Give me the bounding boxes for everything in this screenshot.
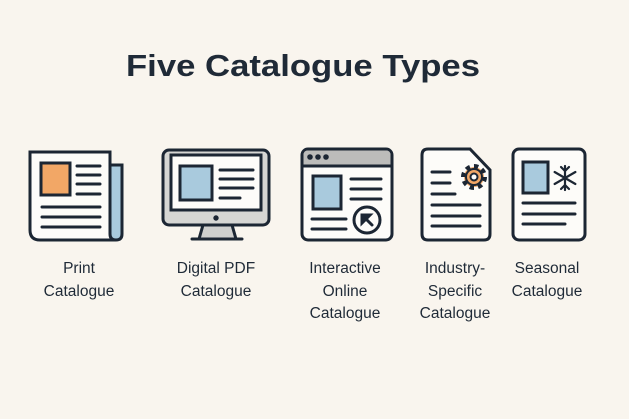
labels: Print xyxy=(63,260,96,277)
labels: Industry- xyxy=(425,260,485,277)
icon: seasonal document xyxy=(513,149,585,240)
labels: Digital PDF xyxy=(177,260,255,277)
labels: Catalogue xyxy=(420,305,490,322)
icon: print catalogue xyxy=(30,152,122,240)
labels: Catalogue xyxy=(512,283,582,300)
labels: Catalogue xyxy=(181,283,251,300)
labels: Online xyxy=(323,283,367,300)
labels: Catalogue xyxy=(310,305,380,322)
icon: browser xyxy=(302,149,392,240)
labels: Interactive xyxy=(309,260,381,277)
labels: Catalogue xyxy=(44,283,114,300)
labels xyxy=(44,260,582,322)
title: Five Catalogue Types xyxy=(126,48,480,83)
icon: industry document xyxy=(422,149,490,240)
labels: Specific xyxy=(428,283,482,300)
icon: monitor xyxy=(163,150,269,239)
labels: Seasonal xyxy=(515,260,579,277)
